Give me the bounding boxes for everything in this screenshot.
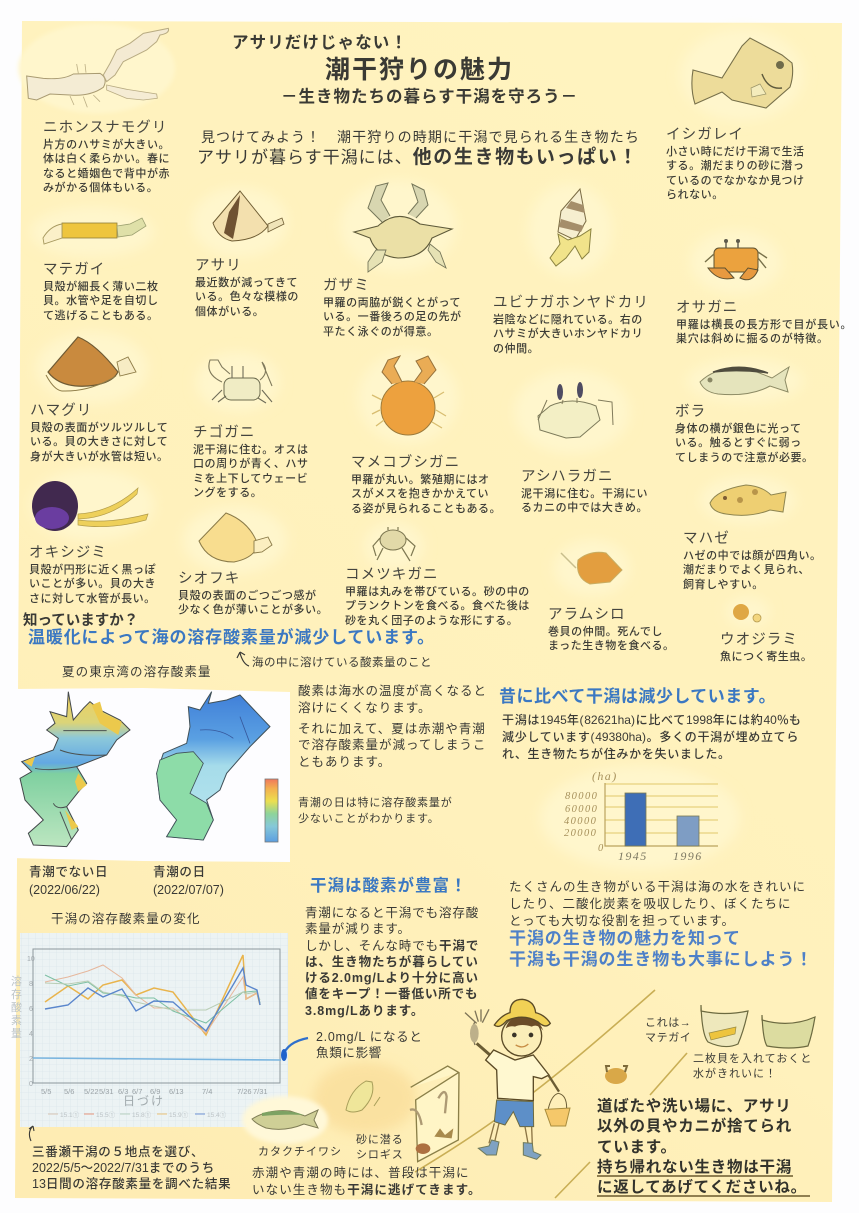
species: シオフキ: 少なく色が薄いことが多い。 xyxy=(178,604,328,616)
species: マハゼ: マハゼ xyxy=(683,531,730,547)
icon: シオフキ xyxy=(183,506,287,574)
maps: Tokyo Bay dissolved oxygen xyxy=(10,688,290,862)
axis labels: 5/22 xyxy=(84,1087,99,1096)
species: チゴガニ: 泥干潟に住む。オスは xyxy=(193,444,308,456)
species: マハゼ: 潮だまりでよく見られ、 xyxy=(683,564,810,576)
axis labels xyxy=(564,769,703,863)
species: ハマグリ: 貝殻の表面がツルツルして xyxy=(30,422,168,434)
axis labels: 1945 xyxy=(618,849,648,863)
claw in hand xyxy=(465,1009,489,1045)
species: オサガニ: オサガニ xyxy=(676,300,738,316)
species: ガザミ: 甲羅の両脇が鋭くとがって xyxy=(323,297,461,309)
species: イシガレイ: する。潮だまりの砂に潜っ xyxy=(666,160,804,172)
text: red and blue tide: それに加えて、夏は赤潮や青潮 xyxy=(298,722,486,736)
icon: マテガイ xyxy=(30,207,154,257)
icon: アシハラガニ xyxy=(514,370,630,454)
text: tidal flat oxygen values: は、生き物たちが暮らしてい xyxy=(305,955,479,969)
bar: 1945 xyxy=(625,793,646,846)
legs xyxy=(489,1123,532,1145)
species: チゴガニ: ミを上下してウェービ xyxy=(193,473,308,485)
map: non blue tide day xyxy=(20,692,130,847)
icon: ボラ xyxy=(687,359,803,403)
text: tidal flat role: たくさんの生き物がいる干潟は海の水をきれいに xyxy=(509,880,806,894)
shorts xyxy=(494,1100,534,1127)
text: temperature and oxygen: 溶けにくくなります。 xyxy=(298,701,432,715)
map caption: blue tide: 青潮の日 xyxy=(153,865,206,879)
line: orange xyxy=(45,955,260,1035)
species: オサガニ: 巣穴は斜めに掘るのが特徴。 xyxy=(676,333,829,345)
species: マテガイ: マテガイ xyxy=(43,262,105,278)
species: マテガイ: 貝。水管や足を自切し xyxy=(43,295,158,307)
species: コメツキガニ: プランクトンを食べる。食べた後は xyxy=(345,600,530,612)
species: イシガレイ: 小さい時にだけ干潟で生活 xyxy=(666,146,805,158)
species: マハゼ: ハゼの中では顔が四角い。 xyxy=(683,550,822,562)
icon: チゴガニ xyxy=(196,352,280,412)
head xyxy=(502,1016,542,1056)
title: subtitle: －生き物たちの暮らす干潟を守ろう－ xyxy=(281,88,578,106)
species: ニホンスナモグリ: なると婚姻色で背中が赤 xyxy=(43,168,170,180)
axis labels: (ha) xyxy=(592,769,618,783)
arrow: chart to 2.0 mg/L note xyxy=(281,1038,308,1061)
chart caption: survey method: 2022/5/5～2022/7/31までのうち xyxy=(32,1161,215,1175)
label: this is a razor clam xyxy=(645,1017,691,1044)
message: return creatures: 道ばたや洗い場に、アサリ xyxy=(597,1098,792,1115)
species: マメコブシガニ: マメコブシガニ xyxy=(351,455,460,471)
heading: tidal flats rich in oxygen: 干潟は酸素が豊富！ xyxy=(310,877,468,895)
species: ハマグリ xyxy=(30,402,169,463)
arm holding bucket xyxy=(548,1075,559,1092)
text: creatures escape to tidal flats xyxy=(252,1166,482,1196)
species: ウオジラミ: ウオジラミ xyxy=(720,632,798,648)
line: pale xyxy=(45,981,260,1010)
text: temperature and oxygen: 酸素は海水の温度が高くなると xyxy=(298,684,487,698)
species: ボラ xyxy=(675,404,814,464)
line: blue xyxy=(45,968,260,1031)
hat xyxy=(494,999,550,1026)
axis labels: 6/13 xyxy=(169,1087,184,1096)
heading: find them: 見つけてみよう！ xyxy=(201,129,321,145)
title: lead line: アサリだけじゃない！ xyxy=(232,34,408,52)
icon: オサガニ xyxy=(690,230,782,294)
message: return creatures: に返してあげてくださいね。 xyxy=(597,1179,807,1196)
axis labels: 7/26 xyxy=(237,1087,252,1096)
label: this is a razor clam: これは→ xyxy=(645,1017,691,1029)
axis labels: 7/4 xyxy=(202,1087,212,1096)
text: temperature and oxygen xyxy=(298,684,487,715)
illustration: road and ground lines xyxy=(415,990,687,1198)
text: red and blue tide: で溶存酸素量が減ってしまうこ xyxy=(298,738,486,752)
chart title: dissolved oxygen change: 干潟の溶存酸素量の変化 xyxy=(51,912,201,926)
species: ユビナガホンヤドカリ: ハサミが大きいホンヤドカリ xyxy=(493,328,643,340)
legend: 15.8① xyxy=(132,1111,152,1119)
bar chart: tidal flat area xyxy=(540,766,740,870)
chart caption: survey method xyxy=(32,1145,231,1191)
text: tidal flat oxygen values: しかし、そんな時でも干潟で xyxy=(305,939,479,953)
species: コメツキガニ: 砂を丸く団子のような形にする。 xyxy=(345,615,518,627)
text: tidal flat oxygen values: 値をキープ！一番低い所でも xyxy=(305,987,478,1001)
shirt xyxy=(486,1050,549,1101)
line chart: dissolved oxygen change: 日づけ xyxy=(123,1094,165,1108)
species: イシガレイ: られない。 xyxy=(666,189,724,201)
species: ボラ: ボラ xyxy=(675,404,706,420)
line: pink xyxy=(45,965,260,1033)
species: マメコブシガニ xyxy=(351,454,501,515)
icon: ニホンスナモグリ xyxy=(18,23,175,113)
heading: many creatures: アサリが暮らす干潟には、他の生き物もいっぱい！ xyxy=(197,147,639,168)
legend: oxygen colour scale xyxy=(265,779,278,842)
text: tidal flat decrease detail: 干潟は1945年(82621ha)に比べて1998年には約40％も xyxy=(502,712,802,726)
species: アサリ xyxy=(195,258,299,318)
species: ニホンスナモグリ: ニホンスナモグリ xyxy=(43,120,168,136)
message: value tidal flats: 干潟の生き物の魅力を知って xyxy=(509,928,741,948)
species: チゴガニ xyxy=(193,424,308,499)
caption: bivalves clean water xyxy=(693,1052,812,1080)
species: ハマグリ: ハマグリ xyxy=(30,403,92,419)
chart title: Tokyo Bay maps: 夏の東京湾の溶存酸素量 xyxy=(62,665,212,679)
text: red and blue tide xyxy=(298,722,486,768)
species: オキシジミ: いことが多い。貝の大き xyxy=(29,578,156,590)
species: シオフキ: シオフキ xyxy=(178,571,240,587)
species: ユビナガホンヤドカリ: ユビナガホンヤドカリ xyxy=(493,295,649,311)
label: カタクチイワシ: カタクチイワシ xyxy=(258,1146,342,1158)
icon: コメツキガニ xyxy=(364,522,424,570)
axis labels: 5/5 xyxy=(41,1087,51,1096)
species: ウオジラミ: 魚につく寄生虫。 xyxy=(720,651,812,663)
map caption: blue tide xyxy=(153,865,224,897)
text: tidal flat decrease detail xyxy=(502,712,802,760)
icon: イシガレイ xyxy=(680,29,804,121)
species: ボラ: てしまうので注意が必要。 xyxy=(675,452,814,464)
species: ハマグリ: 身が大きいが水管は短い。 xyxy=(30,451,169,463)
arm xyxy=(477,1043,490,1055)
illustration: カタクチイワシ xyxy=(242,1096,328,1144)
illustration: bucket with razor clam xyxy=(701,1005,748,1047)
species: マメコブシガニ: 甲羅が丸い。繁殖期にはオ xyxy=(351,474,490,486)
note: 2.0 mg/L effect: 魚類に影響 xyxy=(316,1046,382,1060)
illustration: bucket with clear water xyxy=(762,1015,815,1048)
label: this is a razor clam: マテガイ xyxy=(645,1032,691,1044)
map caption: not blue tide xyxy=(29,865,108,897)
note: 2.0 mg/L effect xyxy=(316,1030,423,1060)
chart caption: survey method: 三番瀬干潟の５地点を選び、 xyxy=(32,1145,204,1159)
species: マメコブシガニ: る姿が見られることもある。 xyxy=(351,503,501,515)
species: マハゼ: 飼育しやすい。 xyxy=(683,579,764,591)
species: マテガイ: 貝殻が細長く薄い二枚 xyxy=(43,281,158,293)
chart caption: survey method: 13日間の溶存酸素量を調べた結果 xyxy=(32,1177,231,1191)
species: マテガイ: て逃げることもある。 xyxy=(43,310,158,322)
species: オサガニ: 甲羅は横長の長方形で目が長い。 xyxy=(676,319,852,331)
species: アラムシロ: まった生き物を食べる。 xyxy=(548,640,675,652)
text: tidal flat role xyxy=(509,880,806,928)
caption: bivalves clean water: 水がきれいに！ xyxy=(693,1068,777,1080)
text: tidal flat oxygen values xyxy=(305,906,479,1018)
illustration: child with hat and bucket xyxy=(465,999,570,1159)
label: シロギス: 砂に潜る xyxy=(356,1134,404,1146)
message: return creatures: ています。 xyxy=(597,1139,677,1156)
caption: bivalves clean water: 二枚貝を入れておくと xyxy=(693,1053,812,1065)
text: tidal flat role: とっても大切な役割を担っています。 xyxy=(509,914,735,928)
message: return creatures: 以外の貝やカニが捨てられ xyxy=(597,1118,792,1135)
axis labels: 7/31 xyxy=(253,1087,268,1096)
axis labels: 60000 xyxy=(565,804,598,815)
underline: bottom message xyxy=(597,1176,810,1196)
line chart: dissolved oxygen change: 10 xyxy=(27,956,35,963)
text: red and blue tide: ともあります。 xyxy=(298,754,391,768)
species: アサリ: 個体がいる。 xyxy=(195,306,264,318)
text: tidal flat oxygen values: ける2.0mg/Lより十分に高い xyxy=(305,971,479,985)
line chart: dissolved oxygen change: 2 xyxy=(29,1056,33,1063)
species: アシハラガニ xyxy=(521,468,648,514)
species: アシハラガニ: アシハラガニ xyxy=(521,469,614,485)
legend: 15.1① xyxy=(60,1111,80,1119)
axis labels xyxy=(41,1087,268,1096)
axis labels: 1996 xyxy=(673,849,703,863)
icon: アサリ xyxy=(192,187,288,257)
map: blue tide day xyxy=(157,692,270,840)
map caption: blue tide: (2022/07/07) xyxy=(153,883,224,897)
icon: オキシジミ xyxy=(30,469,154,541)
icon: マメコブシガニ xyxy=(358,352,458,444)
species: シオフキ: 貝殻の表面のごつごつ感が xyxy=(178,590,317,602)
axis labels: 20000 xyxy=(564,828,597,839)
message: return creatures: 持ち帰れない生き物は干潟 xyxy=(597,1159,792,1176)
species: コメツキガニ: コメツキガニ xyxy=(345,567,439,583)
axis labels: 5/31 xyxy=(99,1087,114,1096)
heading: season note: 潮干狩りの時期に干潟で見られる生き物たち xyxy=(337,129,640,145)
species: ニホンスナモグリ: みがかる個体もいる。 xyxy=(43,182,158,194)
text: creatures escape to tidal flats: いない生き物も干潟に逃げてきます。 xyxy=(252,1182,482,1196)
line chart: dissolved oxygen change: 溶 xyxy=(11,975,22,988)
axis labels: 6/9 xyxy=(150,1087,160,1096)
species: ガザミ: いる。一番後ろの足の先が xyxy=(323,311,462,323)
text: blue tide days: 青潮の日は特に溶存酸素量が xyxy=(298,797,453,809)
heading: warming reduces dissolved oxygen: 温暖化によって海の溶存酸素量が減少しています。 xyxy=(28,628,435,647)
species: ユビナガホンヤドカリ xyxy=(493,294,649,355)
icon: small arrow to dissolved oxygen note xyxy=(237,652,249,666)
text: tidal flat oxygen values: 3.8mg/Lあります。 xyxy=(305,1004,424,1018)
species: アラムシロ: 巻貝の仲間。死んでし xyxy=(548,626,663,638)
species: マテガイ xyxy=(43,262,158,322)
illustration: シロギス in sand xyxy=(313,1062,417,1134)
axis labels: 80000 xyxy=(565,791,598,802)
species: ニホンスナモグリ: 体は白く柔らかい。春に xyxy=(43,153,170,165)
icon: アラムシロ xyxy=(554,540,630,596)
threshold line: 2.0 mg/L xyxy=(33,1058,281,1060)
message: value tidal flats xyxy=(509,928,813,968)
axis labels: 6/7 xyxy=(132,1087,142,1096)
text: tidal flat decrease detail: れ、生き物たちが住みかを失いました。 xyxy=(502,746,731,760)
species: オキシジミ: さに対して水管が長い。 xyxy=(29,593,156,605)
species: アサリ: いる。色々な模様の xyxy=(195,291,299,303)
message: value tidal flats: 干潟も干潟の生き物も大事にしよう！ xyxy=(509,950,813,968)
species: マメコブシガニ: スがメスを抱きかかえてい xyxy=(351,488,489,500)
species: ガザミ: 平たく泳ぐのが得意。 xyxy=(323,326,438,338)
species: ニホンスナモグリ xyxy=(43,119,170,194)
text: blue tide days: 少ないことがわかります。 xyxy=(298,812,440,824)
species: アラムシロ xyxy=(548,607,675,652)
species: アサリ: 最近数が減ってきて xyxy=(195,277,298,289)
illustration: sign board xyxy=(410,1066,459,1162)
axis labels: 0 xyxy=(598,843,605,854)
text: tidal flat decrease detail: 減少しています(49380ha)。多くの干潟が埋め立てら xyxy=(502,730,799,744)
species: オキシジミ: オキシジミ xyxy=(29,545,107,561)
species: ハマグリ: いる。貝の大きさに対して xyxy=(30,436,168,448)
line chart: dissolved oxygen change: 0 xyxy=(29,1081,33,1088)
species: ユビナガホンヤドカリ: の仲間。 xyxy=(493,343,539,355)
axis labels: 6/3 xyxy=(118,1087,128,1096)
line chart: dissolved oxygen change: 素 xyxy=(11,1014,22,1027)
heading: tidal flats decreasing: 昔に比べて干潟は減少しています。 xyxy=(499,687,776,706)
species: チゴガニ: ングをする。 xyxy=(193,487,262,499)
icon: ウオジラミ xyxy=(726,597,770,627)
species: イシガレイ: ているのでなかなか見つけ xyxy=(666,175,805,187)
species: ボラ: 身体の横が銀色に光って xyxy=(675,423,802,435)
species: コメツキガニ xyxy=(345,566,530,627)
message: return creatures xyxy=(597,1098,807,1196)
species: チゴガニ: 口の周りが青く、ハサ xyxy=(193,458,308,470)
icon: ユビナガホンヤドカリ xyxy=(528,184,612,276)
line chart: dissolved oxygen change: 8 xyxy=(29,981,33,988)
legend: 15.4① xyxy=(207,1111,227,1119)
map caption: not blue tide: 青潮でない日 xyxy=(29,865,108,879)
species: アサリ: アサリ xyxy=(195,258,242,274)
legend: 15.5① xyxy=(96,1111,116,1119)
species: アラムシロ: アラムシロ xyxy=(548,607,626,623)
species: ウオジラミ xyxy=(720,632,812,663)
species: チゴガニ: チゴガニ xyxy=(193,425,255,441)
species: ボラ: いる。触るとすぐに弱っ xyxy=(675,437,802,449)
species: イシガレイ xyxy=(666,126,805,201)
icon: マハゼ xyxy=(700,476,796,524)
species: コメツキガニ: 甲羅は丸みを帯びている。砂の中の xyxy=(345,586,530,598)
bar: 1996 xyxy=(677,816,699,846)
species: アシハラガニ: るカニの中では大きめ。 xyxy=(521,502,648,514)
text: blue tide days xyxy=(298,796,453,824)
line chart: dissolved oxygen change: 4 xyxy=(29,1031,33,1038)
axis labels: 5/6 xyxy=(64,1087,74,1096)
species: マハゼ xyxy=(683,530,822,591)
legend: 15.9① xyxy=(169,1111,189,1119)
species: シオフキ xyxy=(178,571,328,616)
label: シロギス: シロギス xyxy=(356,1148,404,1160)
icon: small crab xyxy=(605,1066,627,1084)
species: アシハラガニ: 泥干潟に住む。干潟にい xyxy=(521,488,648,500)
line chart: dissolved oxygen change: 存 xyxy=(11,987,22,1001)
icon: ガザミ xyxy=(340,180,456,272)
line chart: dissolved oxygen change: 量 xyxy=(11,1027,22,1040)
line chart: dissolved oxygen change xyxy=(11,933,288,1127)
line: green xyxy=(45,975,260,1023)
map caption: not blue tide: (2022/06/22) xyxy=(29,883,100,897)
icon: ハマグリ xyxy=(36,332,148,404)
line chart: dissolved oxygen change: 酸 xyxy=(11,1000,22,1014)
species: オキシジミ xyxy=(29,545,156,605)
note: 2.0 mg/L effect: 2.0mg/L になると xyxy=(316,1030,423,1044)
species: オキシジミ: 貝殻が円形に近く黒っぽ xyxy=(29,564,156,576)
species: イシガレイ: イシガレイ xyxy=(666,127,744,143)
species: ガザミ xyxy=(323,278,462,338)
line chart: dissolved oxygen change: 6 xyxy=(29,1006,33,1013)
species: ユビナガホンヤドカリ: 岩陰などに隠れている。右の xyxy=(493,314,643,326)
bucket xyxy=(545,1108,570,1126)
heading: did you know: 知っていますか？ xyxy=(23,613,138,629)
text: tidal flat oxygen values: 素量が減ります。 xyxy=(305,922,411,936)
legend xyxy=(48,1111,227,1119)
text: tidal flat oxygen values: 青潮になると干潟でも溶存酸 xyxy=(305,906,479,920)
species: ガザミ: ガザミ xyxy=(323,278,370,294)
text: creatures escape to tidal flats: 赤潮や青潮の時には、普段は干潟に xyxy=(252,1166,470,1180)
arrow: chart caption pointer xyxy=(29,1126,34,1141)
text: tidal flat role: したり、二酸化炭素を吸収したり、ぼくたちに xyxy=(509,897,792,911)
label: シロギス xyxy=(356,1134,404,1160)
note: dissolved oxygen definition: 海の中に溶けている酸素量のこと xyxy=(252,657,432,669)
title: main: 潮干狩りの魅力 xyxy=(325,56,514,84)
species: ニホンスナモグリ: 片方のハサミが大きい。 xyxy=(43,139,170,151)
axis labels: 40000 xyxy=(564,816,597,827)
species: オサガニ xyxy=(676,300,852,345)
